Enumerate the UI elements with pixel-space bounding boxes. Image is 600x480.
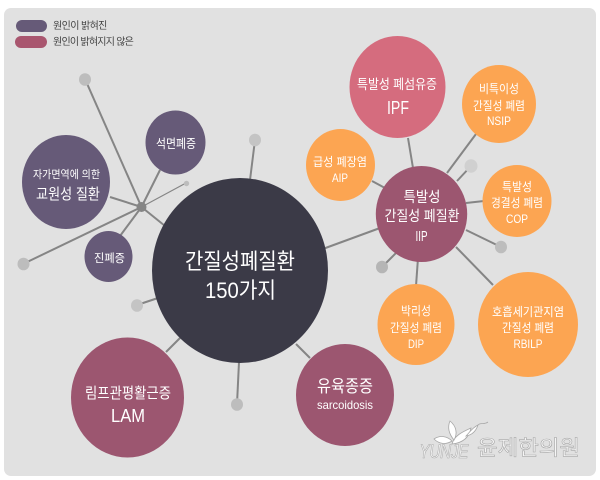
circle: COP: [482, 165, 552, 237]
circle: sarcoidosis: [296, 344, 394, 446]
central circle: interstitial lung disease: 150가지: [205, 278, 276, 303]
circle: DIP: 간질성 폐렴: [390, 321, 442, 335]
circle: DIP: [378, 284, 454, 365]
circle: autoimmune disease: 교원성 질환: [36, 186, 100, 203]
node dot: [464, 159, 478, 173]
circle: IPF: [350, 36, 446, 138]
circle: IPF: 특발성 폐섬유증: [357, 77, 437, 92]
circle: asbestosis: [146, 110, 206, 174]
node dot: [249, 134, 261, 146]
circle: DIP: DIP: [408, 337, 424, 351]
circle: NSIP: NSIP: [487, 114, 511, 128]
circle: LAM: [71, 338, 184, 458]
circle: LAM: LAM: [111, 406, 145, 426]
circle: sarcoidosis: sarcoidosis: [317, 398, 373, 412]
icon: leaf sprout: [434, 421, 488, 444]
legend swatch: cause known: [16, 20, 47, 32]
node dot: [231, 398, 243, 411]
circle: sarcoidosis: 유육종증: [317, 377, 373, 396]
circle: LAM: 림프관평활근증: [85, 385, 171, 402]
circle: IIP: 특발성: [404, 189, 440, 206]
circle: NSIP: 간질성 폐렴: [473, 99, 525, 113]
circle: COP: COP: [506, 212, 528, 226]
node dot: [79, 73, 91, 86]
circle: IIP: IIP: [416, 229, 428, 245]
circle: RBILP: 호흡세기관지염: [492, 305, 564, 319]
gray nodes: [18, 73, 507, 411]
circle: RBILP: 간질성 폐렴: [502, 321, 554, 335]
circle: autoimmune disease: 자가면역에 의한: [33, 168, 100, 181]
logo: Yunje clinic: [420, 421, 580, 463]
central circle: interstitial lung disease: 간질성폐질환: [185, 249, 295, 274]
legend: [15, 20, 134, 48]
circle: asbestosis: 석면폐증: [156, 137, 196, 151]
circle: AIP: AIP: [332, 171, 348, 185]
logo wordmark korean: 윤제한의원: [477, 437, 580, 460]
node dot: [495, 241, 507, 253]
circle: AIP: 급성 폐장염: [313, 155, 367, 169]
legend label: cause unknown: 원인이 밝혀지지 않은: [53, 36, 134, 48]
circle: AIP: [306, 129, 375, 201]
circle: NSIP: [462, 65, 536, 143]
legend label: cause known: 원인이 밝혀진: [53, 20, 107, 32]
circle: RBILP: [478, 272, 578, 377]
circle: autoimmune disease: [22, 135, 110, 229]
node dot: [18, 258, 30, 270]
connector lines: [23, 79, 501, 404]
circle: pneumoconiosis: 진폐증: [94, 252, 125, 265]
hub dot: [136, 202, 146, 212]
circle: COP: 경결성 폐렴: [491, 196, 543, 210]
circle: pneumoconiosis: [84, 231, 132, 282]
node dot: [131, 299, 143, 312]
circle: IIP: 간질성 폐질환: [384, 208, 460, 225]
circle: IIP: [376, 166, 467, 262]
node dot small: [184, 181, 189, 186]
central circle: interstitial lung disease: [152, 178, 328, 363]
legend swatch: cause unknown: [15, 36, 47, 48]
circle: NSIP: 비특이성: [479, 82, 519, 96]
circle: DIP: 박리성: [401, 304, 431, 318]
circle: COP: 특발성: [502, 180, 532, 194]
logo wordmark latin: YUNJE: [420, 442, 469, 463]
circle: IPF: IPF: [387, 98, 409, 118]
circle: RBILP: RBILP: [514, 337, 542, 351]
node dot: [376, 261, 388, 273]
